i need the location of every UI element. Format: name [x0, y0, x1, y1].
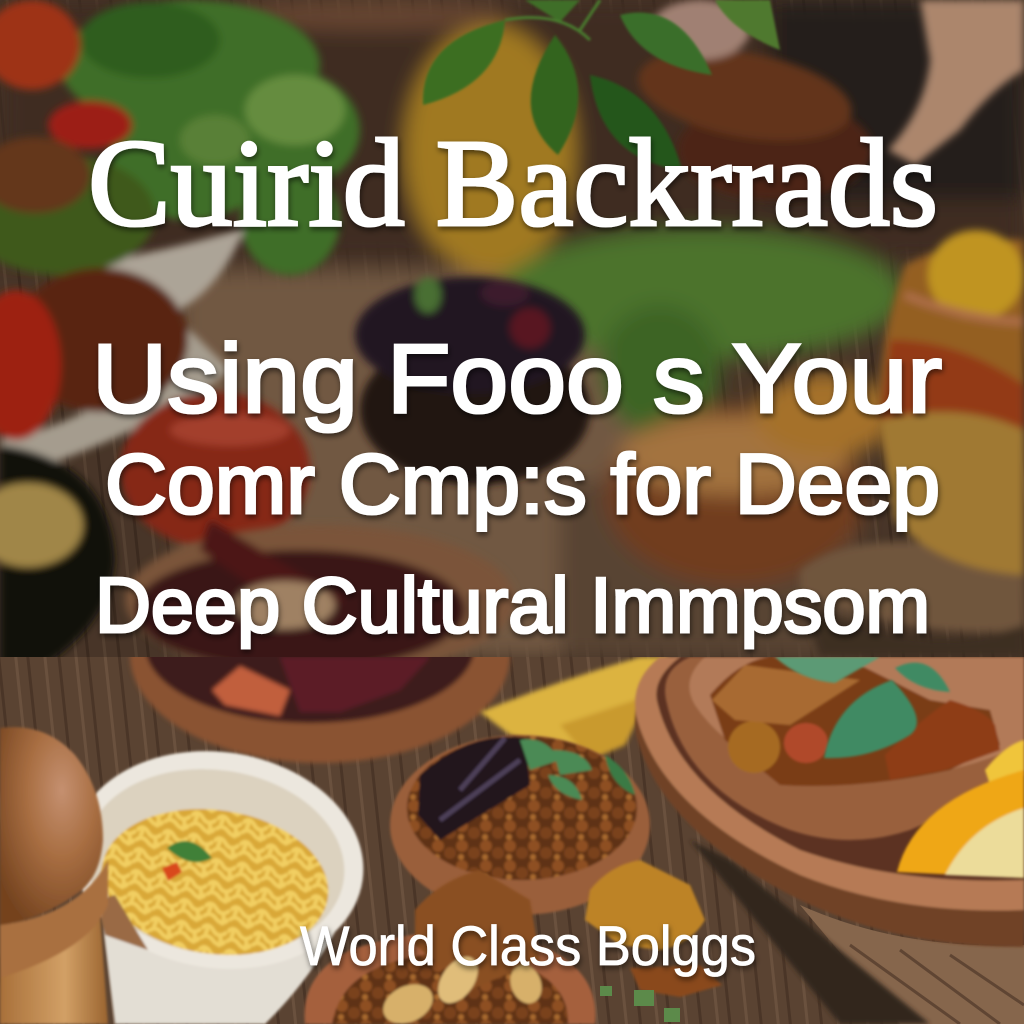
dark berry bowl: [356, 362, 595, 490]
title line 2: Using Fooo s Your: [92, 324, 942, 433]
bowl of food right of center: [605, 405, 865, 585]
black bowl with grain: [0, 445, 115, 690]
rough dark board: [690, 840, 930, 1024]
herb garnish: [167, 841, 212, 862]
blurred upper food photo: [0, 0, 1024, 690]
meat bowl: [678, 117, 872, 200]
white noodle bowl: [81, 749, 366, 1024]
mint leaves: [775, 657, 950, 758]
chile and nut bowl: [390, 735, 650, 915]
footer brand: World Class Bolggs: [300, 914, 756, 977]
title line 3: Comr Cmp:s for Deep: [105, 437, 940, 531]
lighter wood bottom right: [800, 905, 1024, 1024]
rear backdrop: [0, 0, 1024, 260]
nut cluster on table: [585, 860, 722, 997]
tomato: [120, 392, 310, 548]
basil leaves: [423, 0, 780, 170]
title line 4: Deep Cultural Immpsom: [95, 561, 930, 649]
dried chile bowl: [128, 657, 512, 766]
center lettuce: [495, 230, 905, 360]
green herb bits: [600, 986, 680, 1022]
lower food photo: [0, 657, 1024, 1024]
hand: [888, 0, 1024, 165]
jar: [876, 234, 1024, 460]
lettuce top left: [60, 0, 360, 275]
amber glass: [405, 25, 575, 275]
white bowl left: [100, 228, 245, 312]
red tomato left: [0, 290, 61, 440]
lemon wedge: [897, 740, 1024, 878]
dried chile bowl upper: [122, 518, 510, 657]
darkening band behind title: [0, 0, 1024, 657]
wooden board right: [800, 542, 1024, 632]
bottom nut bowl: [305, 870, 595, 1024]
clay bowl with meat: [665, 657, 1024, 840]
roast meat: [12, 268, 188, 412]
large clay plate: [635, 657, 1024, 947]
wooden pestle: [0, 727, 108, 1024]
salad top left: [0, 0, 80, 90]
title line 1: Cuirid Backrrads: [88, 115, 938, 253]
yellow chips: [480, 657, 668, 760]
plate edge: [0, 330, 230, 470]
